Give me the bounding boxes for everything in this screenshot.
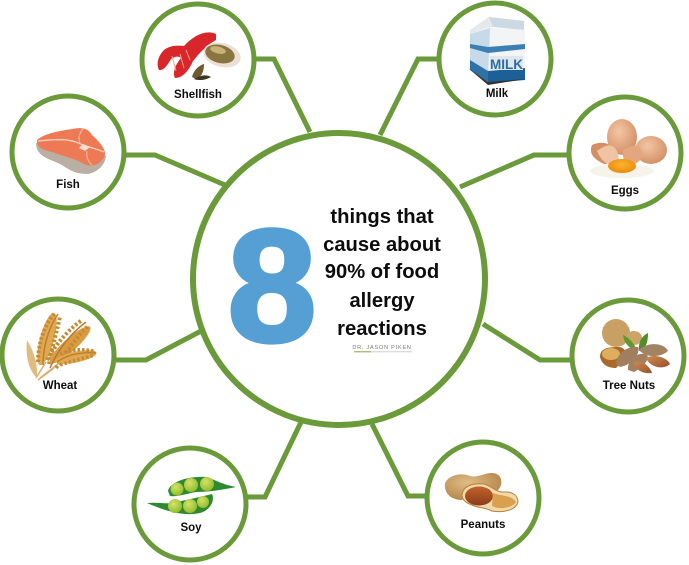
label: Fish [56, 179, 80, 191]
icon: soy pods [147, 477, 236, 514]
node: Eggs [569, 97, 681, 209]
label: Tree Nuts [603, 380, 655, 392]
icon: walnuts and almonds [600, 319, 670, 373]
connector: eggs [460, 155, 569, 187]
connector: tree nuts [483, 324, 572, 360]
headline text [323, 206, 441, 340]
node: Milk [439, 3, 551, 115]
node: Wheat [2, 299, 114, 411]
big numeral 8: 8 [228, 196, 316, 375]
connector: wheat [114, 330, 203, 360]
connector: soy [245, 420, 302, 497]
headline text: cause about [323, 234, 441, 256]
label: Shellfish [174, 89, 222, 101]
connector: fish [124, 155, 225, 185]
headline text: reactions [337, 318, 427, 340]
headline text: allergy [349, 290, 415, 312]
headline text: 90% of food [325, 261, 439, 283]
icon: wheat ears [27, 311, 98, 380]
label: Soy [180, 522, 202, 534]
label: Milk [486, 88, 509, 100]
label: Wheat [43, 380, 77, 392]
connector: milk [380, 59, 441, 135]
label: Peanuts [461, 519, 505, 531]
headline text: things that [330, 206, 434, 228]
node: Soy [134, 448, 246, 560]
icon: lobster, oyster and mussel [158, 32, 243, 80]
central hub panel [193, 133, 485, 425]
logo: Dr. Jason Piken: DR. JASON PIKEN [352, 345, 412, 351]
icon: eggs with yolk [590, 119, 667, 178]
icon: peanuts [445, 473, 518, 512]
connector: shellfish [256, 59, 310, 132]
connector: peanuts [372, 424, 427, 496]
carton label: MILK [490, 57, 523, 72]
icon: salmon steak [36, 128, 106, 174]
node: Fish [12, 96, 124, 208]
node: Peanuts [427, 442, 539, 554]
node: Shellfish [142, 4, 254, 116]
label: Eggs [611, 185, 639, 197]
node: Tree Nuts [572, 300, 684, 412]
